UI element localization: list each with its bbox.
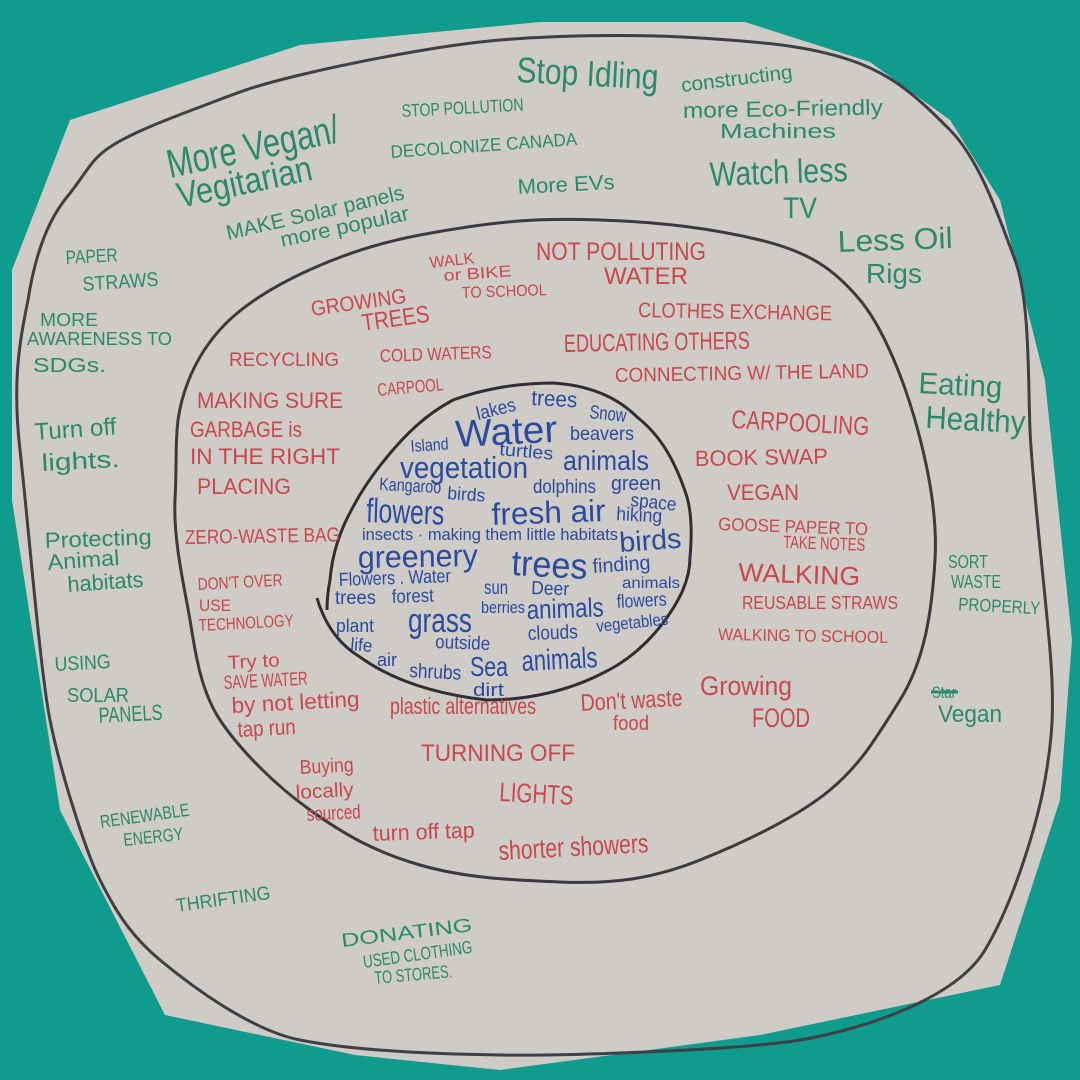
note: less oil rigs: Less Oil xyxy=(837,222,953,259)
note: protecting animal habitats: habitats xyxy=(67,567,144,597)
note: protecting animal habitats: Protecting xyxy=(44,524,152,553)
note: educating others: EDUCATING OTHERS xyxy=(564,327,750,358)
note: not polluting water: NOT POLLUTING xyxy=(536,238,706,266)
word: berries: berries xyxy=(481,598,525,617)
note: watch less TV: Watch less xyxy=(709,151,848,194)
note: more awareness to SDGs: MORE xyxy=(40,310,98,330)
middle ring notes xyxy=(185,238,898,866)
note: vegan: VEGAN xyxy=(727,480,799,505)
note: growing trees: TREES xyxy=(360,301,431,337)
note: don't waste food: food xyxy=(613,713,649,735)
note: shorter showers: shorter showers xyxy=(498,828,649,866)
note: donating used clothing to stores xyxy=(340,915,474,988)
note: try to save water by not letting tap run xyxy=(223,650,360,742)
word: finding animals: animals xyxy=(622,575,680,592)
note: stop pollution: STOP POLLUTION xyxy=(401,95,524,121)
note: less oil rigs xyxy=(837,222,953,289)
note: growing food: FOOD xyxy=(752,703,810,733)
note: walk or bike to school: or BIKE xyxy=(443,263,512,285)
note: make solar panels more popular: more popular xyxy=(278,202,411,252)
note: more vegan or vegetarian: Vegitarian xyxy=(173,147,316,216)
note: book swap: BOOK SWAP xyxy=(695,444,828,471)
note: don't overuse technology: DON'T OVER xyxy=(197,571,283,594)
word: outside: outside xyxy=(435,632,491,655)
word: animals: animals xyxy=(521,642,598,678)
word: plant life xyxy=(336,616,374,656)
word: forest: forest xyxy=(391,586,435,608)
note: turn off lights: lights. xyxy=(41,446,120,477)
word: greenery: greenery xyxy=(358,538,479,575)
word: animals: animals xyxy=(563,445,649,476)
note: more vegan or vegetarian xyxy=(163,107,344,216)
note: constructing more eco-friendly machines: more Eco-Friendly xyxy=(683,95,883,123)
note: don't overuse technology: USE xyxy=(199,596,231,615)
word: deer: Deer xyxy=(531,578,570,600)
note: walk or bike to school xyxy=(429,250,547,302)
note: sort waste properly: PROPERLY xyxy=(958,594,1041,618)
inner circle xyxy=(317,383,691,700)
note: carpooling: CARPOOLING xyxy=(731,404,870,441)
note: buying locally sourced: Buying xyxy=(299,754,354,779)
word: water: Water xyxy=(454,409,559,456)
note: using solar panels: USING xyxy=(54,651,111,676)
note: sort waste properly: SORT xyxy=(948,552,988,572)
note: making sure garbage is in the right placing xyxy=(190,388,343,499)
word: grass: grass xyxy=(408,602,472,640)
note: more awareness to SDGs xyxy=(27,310,172,377)
note: growing trees: GROWING xyxy=(309,285,408,321)
note: use paper to take notes: GOOSE PAPER TO xyxy=(718,514,868,539)
note: try to save water by not letting tap run: Try to xyxy=(227,650,280,674)
word: flowers: flowers xyxy=(366,492,445,533)
note: don't overuse technology: TECHNOLOGY xyxy=(198,611,294,635)
note: turning off lights xyxy=(421,740,575,811)
word: plant life: plant xyxy=(336,616,374,636)
note: using solar panels: PANELS xyxy=(98,700,163,728)
word: fresh air: fresh air xyxy=(491,493,606,532)
note: recycling: RECYCLING xyxy=(229,350,339,371)
note: renewable energy: ENERGY xyxy=(122,824,184,850)
note: make solar panels more popular: MAKE Solar panels xyxy=(224,182,406,245)
note: connecting with the land: CONNECTING W/ THE LAND xyxy=(615,361,869,387)
note: protecting animal habitats xyxy=(44,524,152,597)
word: vegetables: vegetables xyxy=(595,610,669,636)
word: kangaroo: Kangaroo xyxy=(379,474,442,497)
word: dolphins: dolphins xyxy=(533,477,596,498)
word: lakes: lakes xyxy=(474,395,518,425)
middle circle xyxy=(175,219,935,882)
note: reusable straws: REUSABLE STRAWS xyxy=(742,593,898,613)
note: constructing more eco-friendly machines: Machines xyxy=(720,121,836,143)
word: birds: birds xyxy=(447,483,486,506)
note: walk or bike to school: TO SCHOOL xyxy=(462,282,547,302)
note: eating healthy: Eating xyxy=(918,367,1003,404)
note: not polluting water: WATER xyxy=(604,263,688,290)
note: eating healthy xyxy=(918,367,1026,440)
phrase: insects, making them little habitats: insects · making them little habitats xyxy=(362,525,618,544)
word: trees: trees xyxy=(511,542,589,587)
words: flowers, water: Flowers . Water xyxy=(338,566,452,591)
note: paper straws: PAPER xyxy=(65,245,118,269)
word: animals: animals xyxy=(526,592,604,625)
note: protecting animal habitats: Animal xyxy=(47,545,120,575)
note: sort waste properly: WASTE xyxy=(951,572,1001,592)
word: air: air xyxy=(377,650,397,670)
word: hiking: hiking xyxy=(616,504,663,527)
note: turn off tap: turn off tap xyxy=(372,817,475,846)
note: turn off lights xyxy=(34,413,120,477)
note: growing food xyxy=(700,671,810,733)
inner circle notes xyxy=(335,385,682,700)
note: use paper to take notes: TAKE NOTES xyxy=(783,532,866,555)
word: snow: Snow xyxy=(588,402,628,427)
note: making sure garbage is in the right placing: IN THE RIGHT xyxy=(190,444,340,469)
note: more awareness to SDGs: AWARENESS TO xyxy=(27,329,172,349)
note: turn off lights: Turn off xyxy=(34,413,118,446)
word: trees: trees xyxy=(335,588,376,609)
word: plant life: life xyxy=(350,634,373,656)
note: walking to school: WALKING TO SCHOOL xyxy=(718,625,888,647)
note: constructing more eco-friendly machines xyxy=(680,61,883,143)
note: walking: WALKING xyxy=(738,557,861,591)
word: finding animals: finding xyxy=(592,552,651,578)
note: more vegan or vegetarian: More Vegan/ xyxy=(163,107,344,187)
note: growing food: Growing xyxy=(700,671,792,701)
word: green space xyxy=(611,473,677,516)
note: renewable energy xyxy=(99,800,191,850)
word: turtles: turtles xyxy=(499,439,554,464)
note: sort waste properly xyxy=(948,552,1041,618)
note: turning off lights: LIGHTS xyxy=(499,777,574,811)
note: donating used clothing to stores: USED CLOTHING xyxy=(362,937,473,972)
word: island: Island xyxy=(410,434,449,456)
word: dirt: dirt xyxy=(473,680,504,700)
note: less oil rigs: Rigs xyxy=(866,258,922,289)
word: sun: sun xyxy=(484,578,508,599)
note: Stop Idling: Stop Idling xyxy=(516,49,660,97)
note: paper straws xyxy=(65,245,159,296)
word: sea: Sea xyxy=(470,651,508,682)
note: decolonize Canada: DECOLONIZE CANADA xyxy=(390,129,578,162)
note: using solar panels: SOLAR xyxy=(67,685,129,707)
word: clouds: clouds xyxy=(527,621,578,645)
note: turning off lights: TURNING OFF xyxy=(421,740,575,767)
note: making sure garbage is in the right placing: GARBAGE is xyxy=(190,417,302,442)
note: buying locally sourced: locally xyxy=(295,779,354,804)
note: don't waste food xyxy=(580,685,683,735)
note: don't waste food: Don't waste xyxy=(580,685,683,717)
word: green space: space xyxy=(629,490,677,516)
note: more EVs: More EVs xyxy=(517,171,615,199)
note: using solar panels xyxy=(54,651,163,728)
note: thrifting: THRIFTING xyxy=(175,883,272,917)
word: finding animals xyxy=(592,552,680,592)
note: making sure garbage is in the right placing: MAKING SURE xyxy=(197,388,343,413)
note: zero-waste bag: ZERO-WASTE BAG xyxy=(185,524,340,549)
note: more awareness to SDGs: SDGs. xyxy=(33,355,106,377)
word: trees: trees xyxy=(531,385,578,412)
note: cold water: COLD WATERS xyxy=(379,342,492,366)
note: try to save water by not letting tap run: by not letting xyxy=(231,686,360,718)
note: try to save water by not letting tap run: SAVE WATER xyxy=(223,669,308,694)
note: struck-out word and vegan: Star xyxy=(932,683,956,702)
note: buying locally sourced xyxy=(295,754,361,826)
word: green space: green xyxy=(611,473,661,495)
note: watch less TV xyxy=(709,151,848,225)
note: constructing more eco-friendly machines: constructing xyxy=(680,61,794,97)
note: making sure garbage is in the right placing: PLACING xyxy=(197,474,291,499)
note: carpool: CARPOOL xyxy=(377,374,444,400)
word: flowers: flowers xyxy=(616,589,667,613)
note: eating healthy: Healthy xyxy=(925,399,1026,440)
note: donating used clothing to stores: TO STORES. xyxy=(374,961,453,988)
note: growing trees xyxy=(309,285,431,337)
note: struck-out word and vegan xyxy=(931,683,1002,728)
note: renewable energy: RENEWABLE xyxy=(99,800,191,832)
note: try to save water by not letting tap run: tap run xyxy=(237,714,296,742)
note: struck-out word and vegan: Vegan xyxy=(938,701,1002,728)
note: clothes exchange: CLOTHES EXCHANGE xyxy=(638,299,832,325)
note: use paper to take notes xyxy=(718,514,868,555)
note: walk or bike to school: WALK xyxy=(429,250,475,272)
note: donating used clothing to stores: DONATING xyxy=(340,915,474,952)
note: paper straws: STRAWS xyxy=(82,269,159,296)
word: beavers: beavers xyxy=(570,424,634,445)
note: buying locally sourced: sourced xyxy=(306,801,361,826)
note: watch less TV: TV xyxy=(783,192,817,225)
note: not polluting water xyxy=(536,238,706,290)
word: shrubs: shrubs xyxy=(409,660,462,685)
note: don't overuse technology xyxy=(197,571,294,635)
word: vegetation: vegetation xyxy=(400,450,528,485)
note: plastic alternatives: plastic alternatives xyxy=(390,693,536,719)
word: birds: birds xyxy=(618,523,682,558)
